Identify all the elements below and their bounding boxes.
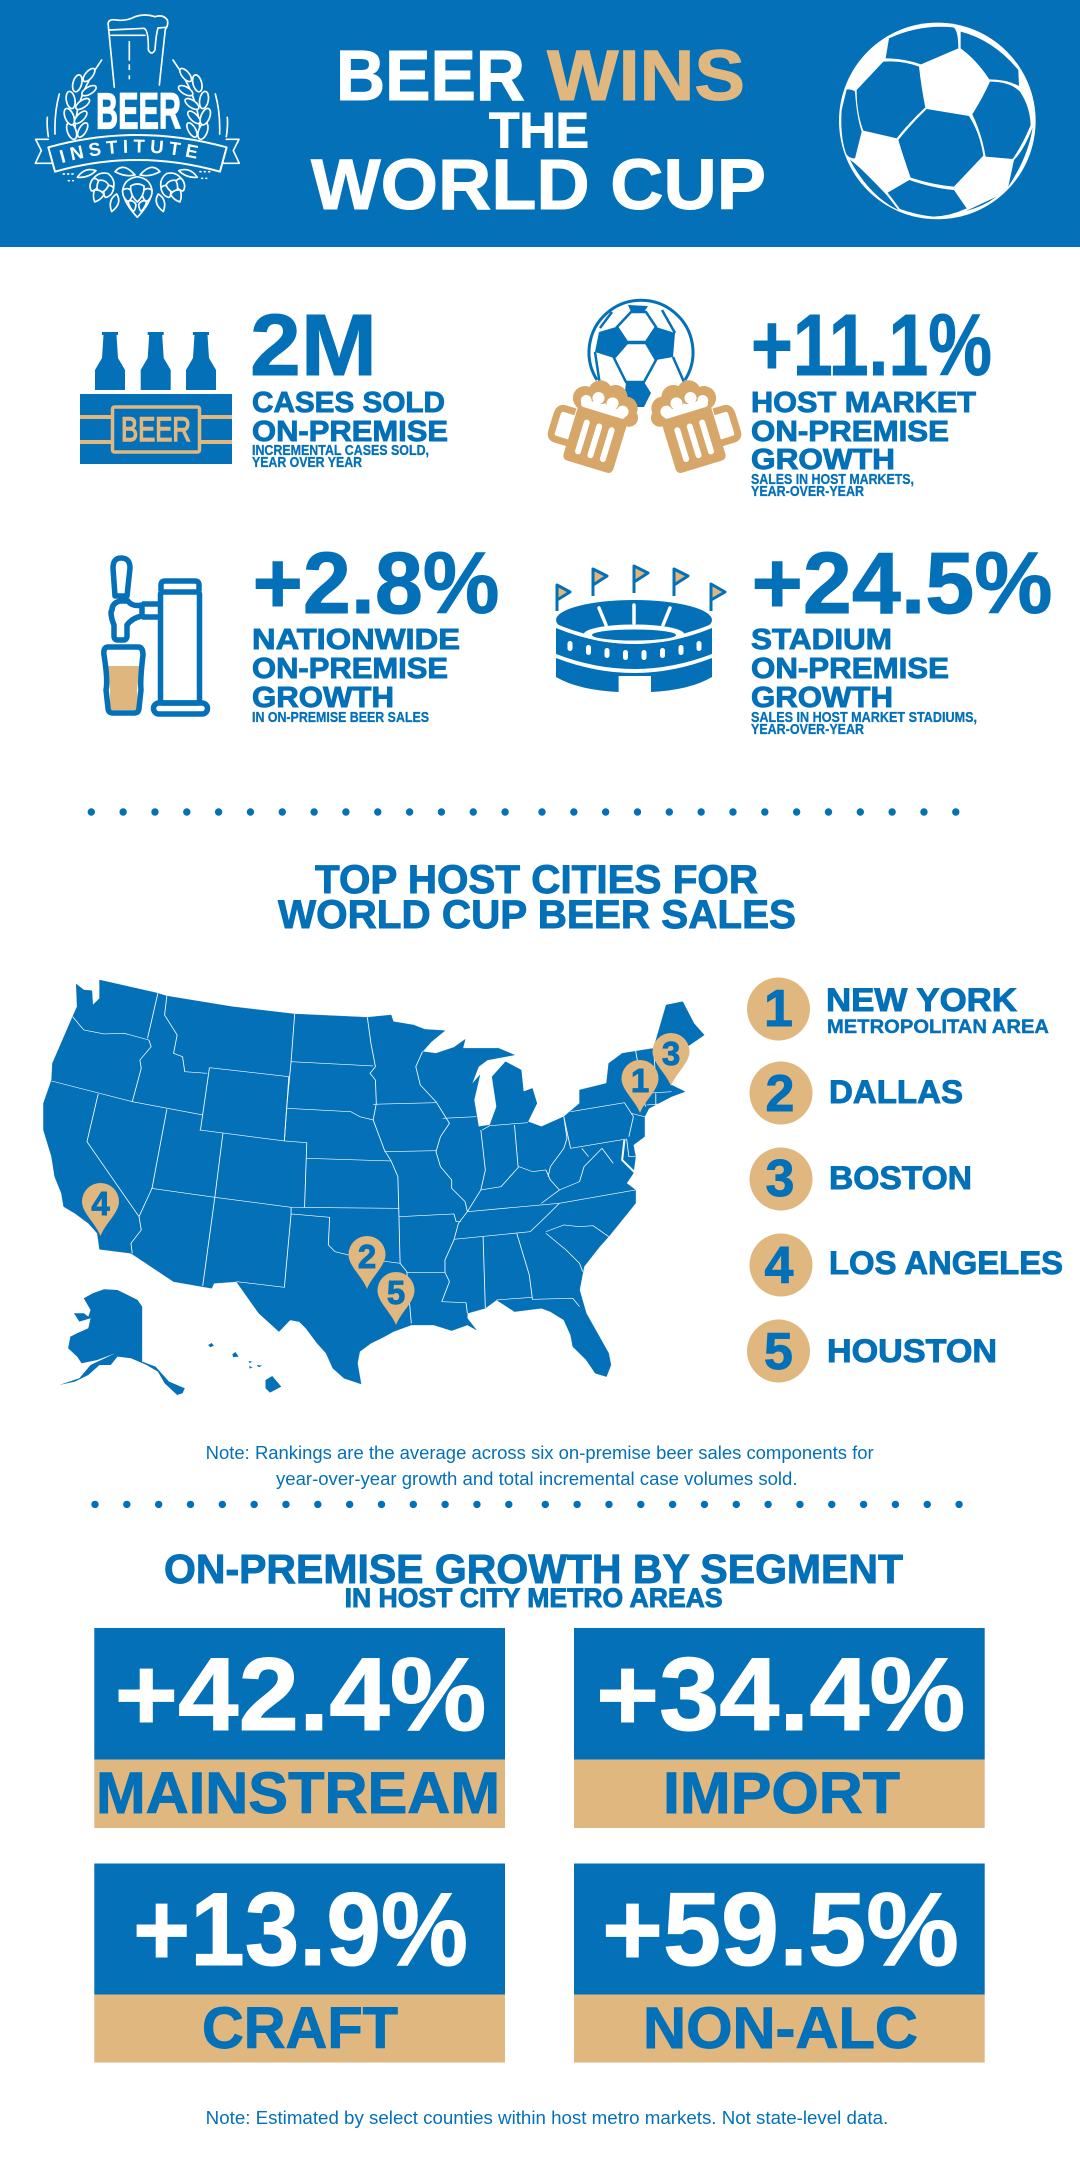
icon: beer crate [80, 332, 232, 464]
stat: +11.1% host market: ON-PREMISE [751, 416, 949, 448]
icon: beer tap and glass [104, 558, 208, 714]
rank 3: Boston: BOSTON [829, 1160, 972, 1196]
pin: 5 Houston [378, 1272, 414, 1325]
logo: Beer Institute [34, 14, 240, 218]
rank 2: Dallas [750, 1062, 963, 1124]
panel: mainstream: MAINSTREAM [96, 1761, 500, 1826]
heading: top host cities: WORLD CUP BEER SALES [278, 893, 796, 937]
stat: +11.1% host market [545, 297, 992, 500]
pin: 4 Los Angeles: 4 [91, 1185, 110, 1222]
stat: +2.8% nationwide: +2.8% [252, 535, 500, 632]
title: THE [489, 102, 589, 158]
logo: Beer Institute: INSTITUTE [60, 140, 198, 163]
panel: craft: CRAFT [202, 1996, 398, 2061]
panel: craft [94, 1864, 505, 2062]
stat: 2M cases sold: YEAR OVER YEAR [252, 455, 362, 471]
pin: 1 New York: 1 [631, 1062, 649, 1099]
stat: +2.8% nationwide: GROWTH [252, 682, 394, 714]
heading: growth by segment: IN HOST CITY METRO AREAS [345, 1583, 723, 1613]
rank 5: Houston: HOUSTON [827, 1333, 997, 1369]
stat: +11.1% host market: SALES IN HOST MARKETS, [751, 472, 914, 488]
heading: top host cities [278, 858, 796, 937]
stat: +24.5% stadium: STADIUM [751, 624, 892, 656]
note: rankings: year-over-year growth and total incremental case volumes sold. [276, 1469, 798, 1489]
panel: import: IMPORT [663, 1761, 900, 1826]
note: rankings [206, 1443, 874, 1489]
icon: beer crate: BEER [121, 411, 191, 449]
title: WORLD CUP [311, 146, 766, 225]
stat: +11.1% host market: HOST MARKET [751, 387, 976, 419]
rank 5: Houston [747, 1320, 997, 1382]
rank 4: Los Angeles: 4 [765, 1237, 794, 1295]
stat: 2M cases sold: 2M [250, 297, 377, 394]
stat: +24.5% stadium: GROWTH [751, 682, 893, 714]
hops cluster [77, 167, 197, 217]
panel: import: +34.4% [596, 1637, 966, 1753]
panel: mainstream: +42.4% [114, 1637, 486, 1753]
note: rankings: Note: Rankings are the average across six on-premise beer sales components for [206, 1443, 874, 1463]
panel: non-alc [574, 1864, 985, 2062]
logo: Beer Institute: BEER [96, 82, 181, 139]
stat: +2.8% nationwide: ON-PREMISE [252, 653, 448, 685]
rank 1: New York: 1 [764, 980, 793, 1038]
rank 1: New York: NEW YORK [826, 982, 1017, 1018]
rank 1: New York: METROPOLITAN AREA [827, 1017, 1049, 1038]
rank 1: New York [747, 978, 1049, 1040]
pin: 3 Boston: 3 [662, 1035, 680, 1072]
stat: +11.1% host market: YEAR-OVER-YEAR [751, 484, 864, 500]
icon: stadium with flags [554, 566, 725, 692]
pin: 2 Dallas [348, 1236, 386, 1289]
panel: craft: +13.9% [133, 1872, 468, 1988]
stat: 2M cases sold: CASES SOLD [252, 387, 445, 419]
rank 5: Houston: 5 [764, 1323, 793, 1381]
rank 4: Los Angeles: LOS ANGELES [829, 1245, 1063, 1281]
stat: +24.5% stadium: YEAR-OVER-YEAR [751, 722, 864, 738]
stat: +24.5% stadium [554, 535, 1052, 738]
header banner [0, 0, 1080, 247]
stat: +11.1% host market: +11.1% [751, 297, 992, 394]
heading: top host cities: TOP HOST CITIES FOR [315, 858, 758, 902]
stat: +11.1% host market: GROWTH [751, 444, 895, 476]
pin: 5 Houston: 5 [387, 1274, 405, 1311]
stat: 2M cases sold: INCREMENTAL CASES SOLD, [252, 443, 429, 459]
panel: non-alc: NON-ALC [643, 1996, 918, 2061]
title: BEER [336, 37, 525, 116]
heading: growth by segment: ON-PREMISE GROWTH BY SEGMENT [164, 1546, 903, 1592]
note: estimates: Note: Estimated by select counties within host metro markets. Not state-level data. [206, 2108, 888, 2128]
pin: 2 Dallas: 2 [358, 1238, 376, 1275]
ranked list of cities [747, 978, 1063, 1382]
pin: 4 Los Angeles [82, 1183, 119, 1236]
stat: +2.8% nationwide [104, 535, 499, 726]
rank 3: Boston: 3 [766, 1150, 794, 1208]
rank 3: Boston [750, 1148, 972, 1210]
stat: 2M cases sold: ON-PREMISE [252, 416, 448, 448]
rank 4: Los Angeles [750, 1234, 1063, 1296]
rank 2: Dallas: 2 [766, 1065, 794, 1123]
stat: 2M cases sold [80, 297, 448, 471]
stat: +2.8% nationwide: NATIONWIDE [252, 624, 460, 656]
stat: +24.5% stadium: ON-PREMISE [751, 653, 949, 685]
panel: non-alc: +59.5% [602, 1872, 959, 1988]
rank 2: Dallas: DALLAS [829, 1074, 963, 1110]
heading: growth by segment [164, 1546, 903, 1613]
icon: soccer ball with beer mugs [545, 300, 744, 477]
panel: mainstream [94, 1628, 505, 1828]
icon: soccer ball [839, 23, 1036, 219]
stat: +24.5% stadium: SALES IN HOST MARKET STADIUMS, [751, 710, 977, 726]
title [311, 37, 766, 225]
stat: +2.8% nationwide: IN ON-PREMISE BEER SALES [252, 710, 429, 726]
stat: +24.5% stadium: +24.5% [752, 535, 1052, 632]
pin: 1 New York [622, 1060, 658, 1113]
pin: 3 Boston [652, 1033, 690, 1086]
panel: import [574, 1628, 985, 1828]
title: WINS [547, 37, 745, 116]
map: United States [43, 980, 704, 1395]
